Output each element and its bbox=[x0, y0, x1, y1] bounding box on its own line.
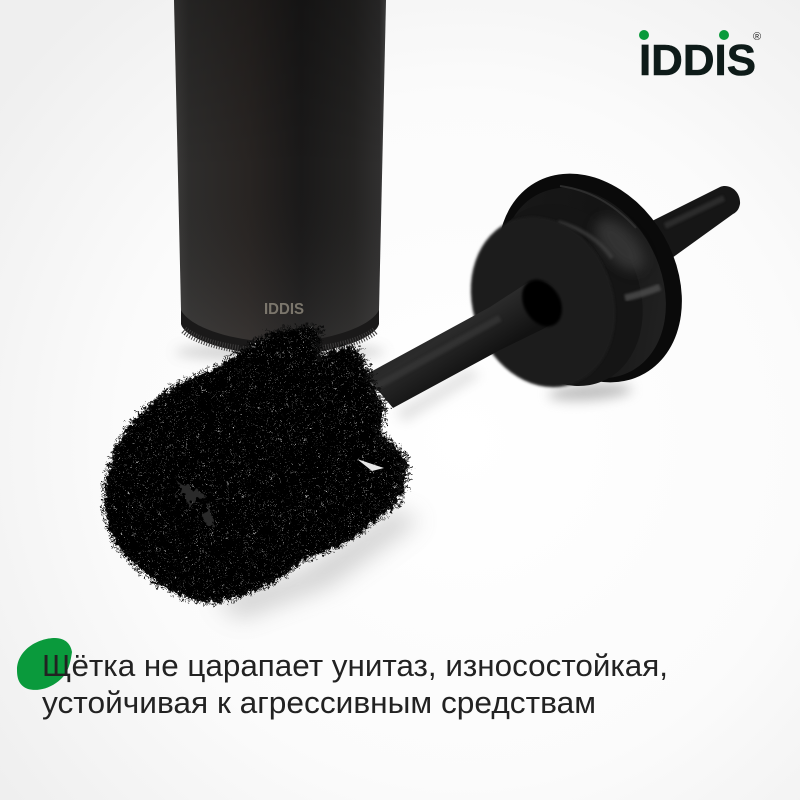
logo dots bbox=[639, 30, 649, 40]
socket shadow bbox=[514, 272, 570, 334]
registered mark: ® bbox=[753, 31, 761, 43]
logo wordmark: IDDIS bbox=[639, 36, 756, 85]
brush head bbox=[100, 320, 412, 610]
shadows on the surface bbox=[175, 343, 632, 618]
logo bbox=[639, 30, 761, 85]
canister body bbox=[174, 0, 386, 342]
caption text: устойчивая к агрессивным средствам bbox=[42, 685, 596, 720]
handle rod bbox=[365, 280, 561, 408]
bristle gap highlight bbox=[357, 459, 384, 471]
caption text: Щётка не царапает унитаз, износостойкая, bbox=[42, 648, 668, 683]
canister bbox=[174, 0, 386, 355]
handle stub behind cap bbox=[650, 186, 740, 258]
cap flange bbox=[461, 140, 719, 416]
cup brushed highlight bbox=[587, 211, 653, 279]
canister base ring bbox=[181, 308, 379, 355]
cap cup bbox=[459, 159, 698, 411]
brush handle bbox=[365, 140, 740, 416]
canister logo: IDDIS bbox=[264, 301, 304, 318]
cap front face bbox=[447, 196, 639, 408]
caption bbox=[17, 638, 677, 720]
green accent blob bbox=[17, 638, 72, 690]
